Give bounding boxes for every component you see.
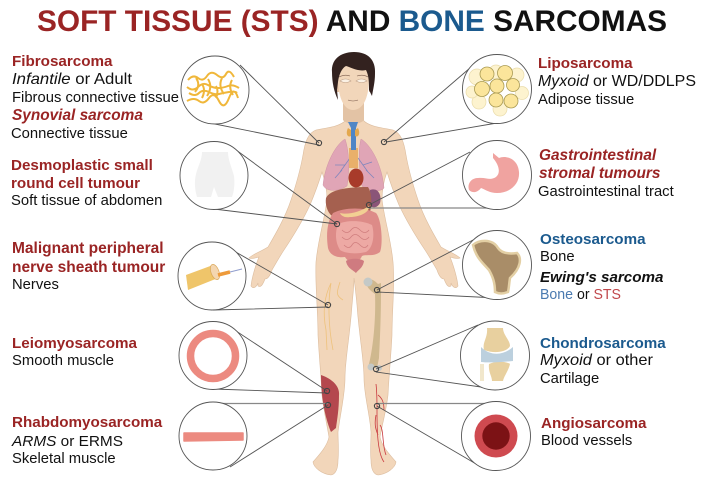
femur	[367, 279, 381, 368]
face	[338, 58, 369, 110]
text: rhabdomyosarcoma: Rhabdomyosarcoma	[12, 414, 163, 431]
title: SOFT TISSUE (STS) AND BONE SARCOMAS	[37, 5, 667, 38]
text: angiosarcoma: Blood vessels	[541, 433, 632, 449]
target markers	[316, 139, 387, 409]
text: osteosarcoma: Bone	[540, 249, 575, 265]
text: leiomyosarcoma	[12, 335, 137, 369]
text: fibrosarcoma: Infantile or Adult	[12, 71, 133, 88]
icon: fibrous connective tissue	[181, 56, 249, 124]
trachea	[348, 122, 358, 150]
icon: smooth muscle ring	[179, 322, 247, 390]
lungs	[323, 139, 384, 191]
great vessels	[349, 148, 358, 168]
text: malignant peripheral nerve sheath tumour	[12, 240, 165, 293]
text: gastrointestinal stromal tumours: Gastrointestinal tract	[538, 184, 674, 200]
nerves	[324, 282, 343, 350]
ears	[335, 76, 373, 92]
text: liposarcoma	[538, 55, 696, 108]
text: fibrosarcoma: Fibrosarcoma	[12, 53, 113, 70]
liver	[326, 187, 371, 216]
hair	[332, 52, 375, 100]
text: desmoplastic small round cell tumour: Soft tissue of abdomen	[11, 193, 162, 209]
text: chondrosarcoma: Chondrosarcoma	[540, 335, 666, 352]
human body figure	[249, 52, 460, 475]
text: desmoplastic small round cell tumour: round cell tumour	[11, 175, 140, 192]
text: synovial sarcoma: Connective tissue	[11, 126, 128, 142]
text: rhabdomyosarcoma: ARMS or ERMS	[11, 433, 123, 450]
icon: adipose cells	[462, 54, 532, 124]
text: chondrosarcoma: Myxoid or other	[540, 352, 654, 369]
spleen and stomach	[368, 189, 381, 207]
text: malignant peripheral nerve sheath tumour: Nerves	[12, 277, 59, 293]
text: rhabdomyosarcoma: Skeletal muscle	[12, 451, 116, 467]
knee joint	[364, 278, 382, 371]
text: angiosarcoma	[541, 415, 647, 449]
text: angiosarcoma: Angiosarcoma	[541, 415, 647, 432]
text: desmoplastic small round cell tumour	[11, 157, 162, 209]
text: malignant peripheral nerve sheath tumour: nerve sheath tumour	[12, 259, 165, 276]
heart	[348, 168, 364, 188]
icon: femur bone	[462, 230, 532, 300]
text: leiomyosarcoma: Smooth muscle	[12, 353, 114, 369]
text: gastrointestinal stromal tumours: stromal tumours	[539, 165, 661, 182]
text: ewing's sarcoma: Bone or STS	[540, 287, 621, 303]
bladder	[346, 259, 364, 273]
text: desmoplastic small round cell tumour: Desmoplastic small	[11, 157, 153, 174]
neck shadow	[343, 100, 364, 124]
text: ewing's sarcoma	[540, 269, 663, 303]
blood vessels	[375, 384, 386, 462]
text: malignant peripheral nerve sheath tumour: Malignant peripheral	[12, 240, 164, 257]
icon: abdomen soft tissue	[180, 142, 248, 210]
leg muscles	[321, 375, 339, 432]
text: osteosarcoma	[540, 231, 646, 265]
text: synovial sarcoma	[11, 107, 143, 142]
icon: knee joint	[460, 321, 530, 390]
pancreas	[340, 206, 369, 217]
text: leiomyosarcoma: Leiomyosarcoma	[12, 335, 137, 352]
intestine folds	[342, 228, 369, 248]
text: chondrosarcoma: Cartilage	[540, 371, 599, 387]
text: fibrosarcoma	[12, 53, 179, 106]
text: synovial sarcoma: Synovial sarcoma	[12, 107, 143, 124]
large intestine	[327, 208, 382, 263]
body silhouette	[249, 112, 460, 475]
text: fibrosarcoma: Fibrous connective tissue	[12, 90, 179, 106]
connector lines	[213, 65, 497, 468]
icon: stomach	[462, 140, 532, 210]
text: liposarcoma: Myxoid or WD/DDLPS	[538, 73, 696, 90]
eyes, brows and mouth	[339, 75, 368, 101]
text: liposarcoma: Adipose tissue	[538, 92, 634, 108]
icon: skeletal muscle fibre	[179, 402, 247, 470]
small intestine	[336, 221, 373, 253]
text: gastrointestinal stromal tumours: Gastrointestinal	[539, 147, 657, 164]
text: ewing's sarcoma: Ewing's sarcoma	[540, 269, 663, 286]
text: gastrointestinal stromal tumours	[538, 147, 674, 200]
text: chondrosarcoma	[540, 335, 666, 387]
icon: nerve	[178, 242, 246, 310]
text: rhabdomyosarcoma	[11, 414, 163, 467]
bronchi	[335, 158, 374, 178]
thyroid	[347, 128, 359, 137]
icon: blood vessel	[462, 402, 530, 470]
text: liposarcoma: Liposarcoma	[538, 55, 633, 72]
text: osteosarcoma: Osteosarcoma	[540, 231, 646, 248]
